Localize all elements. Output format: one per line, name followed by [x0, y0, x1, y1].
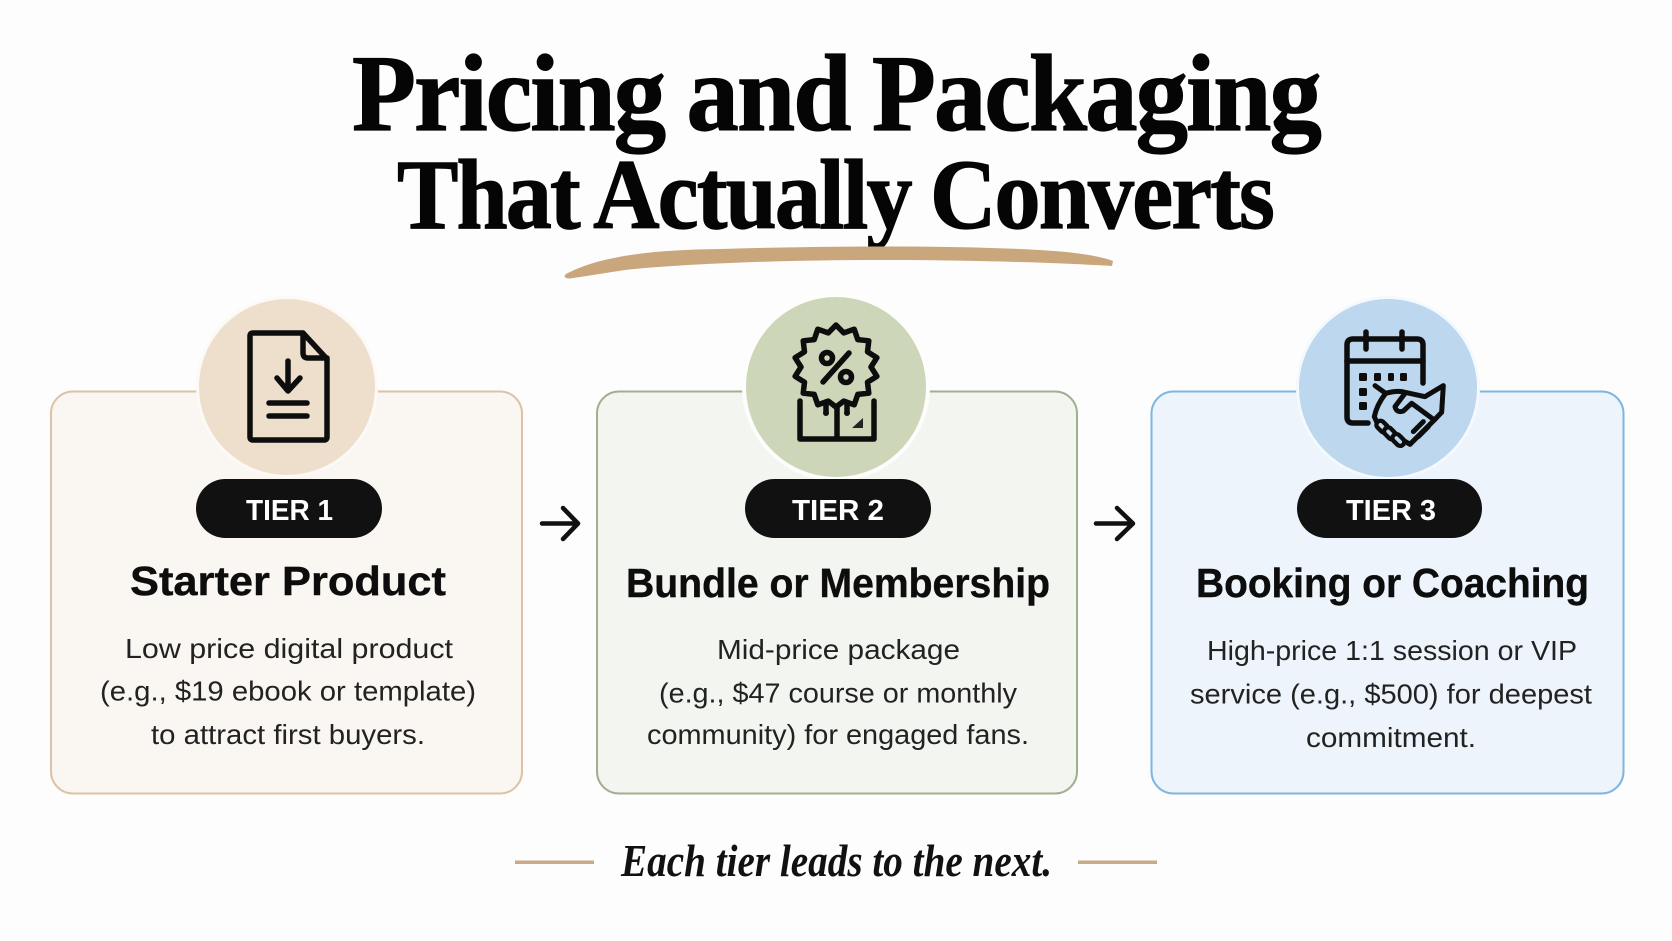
- tier 1 description: to attract first buyers.: [151, 719, 425, 750]
- card 1 background: [51, 392, 522, 794]
- title: Pricing and Packaging: [352, 33, 1321, 154]
- tier 2 description: Mid-price package: [717, 634, 960, 665]
- tier 2 description: (e.g., $47 course or monthly: [659, 678, 1017, 708]
- tier 3 badge: TIER 3: [1346, 495, 1436, 527]
- tier 1 description: [100, 633, 476, 750]
- tier 3 heading: Booking or Coaching: [1196, 560, 1589, 606]
- tier 3 description: service (e.g., $500) for deepest: [1190, 678, 1592, 710]
- panel: tier 3: [1152, 296, 1624, 794]
- tier 2 description: [647, 634, 1029, 750]
- tier 3 description: [1190, 635, 1592, 753]
- card 2 background: [597, 392, 1077, 794]
- tier 1 heading: Starter Product: [130, 558, 446, 604]
- tier 3 badge: [1297, 479, 1482, 538]
- icon: document download: [196, 296, 378, 478]
- tier 2 badge: [745, 479, 931, 538]
- panel: tier 1: [51, 296, 522, 794]
- title: [352, 33, 1321, 250]
- tier 1 badge: TIER 1: [246, 495, 333, 527]
- card 3 background: [1152, 392, 1624, 794]
- footer tagline: Each tier leads to the next.: [620, 835, 1052, 886]
- tier 2 heading: Bundle or Membership: [626, 560, 1050, 606]
- arrow: tier 1 to tier 2: [542, 508, 578, 539]
- tier 3 description: High-price 1:1 session or VIP: [1207, 635, 1577, 666]
- icon: calendar and handshake: [1296, 296, 1480, 480]
- tier 1 badge: [196, 479, 382, 538]
- panel: tier 2: [597, 293, 1077, 794]
- tier 2 badge: TIER 2: [792, 495, 884, 527]
- tier 1 description: Low price digital product: [125, 633, 453, 664]
- title: That Actually Converts: [397, 139, 1273, 250]
- tier 1 description: (e.g., $19 ebook or template): [100, 676, 476, 706]
- tier 3 description: commitment.: [1306, 722, 1476, 753]
- icon: discount bundle box: [742, 293, 930, 481]
- arrow: tier 2 to tier 3: [1096, 508, 1133, 539]
- tier 2 description: community) for engaged fans.: [647, 719, 1029, 750]
- title underline brush stroke: [565, 246, 1113, 279]
